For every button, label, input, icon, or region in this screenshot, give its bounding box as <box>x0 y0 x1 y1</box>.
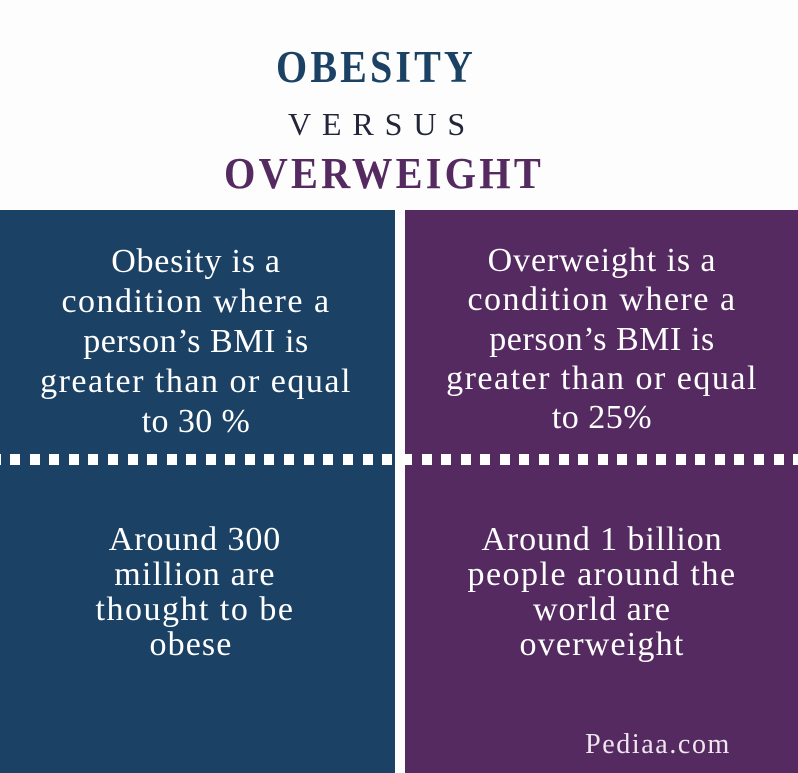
text: overweight definition: to 25% <box>552 399 652 436</box>
text: obesity definition: to 30 % <box>142 403 250 440</box>
title: versus: VERSUS <box>288 106 476 142</box>
text: obesity definition: person’s BMI is <box>83 323 309 360</box>
dotted divider <box>0 454 798 465</box>
text: overweight definition: person’s BMI is <box>489 321 715 358</box>
text: obesity definition: condition where a <box>61 283 331 320</box>
text: overweight prevalence <box>467 521 737 663</box>
text: obesity prevalence <box>96 521 294 663</box>
title: obesity: OBESITY <box>276 42 476 92</box>
text: obesity definition <box>40 243 352 440</box>
text: obesity definition: Obesity is a <box>111 243 281 280</box>
text: overweight definition <box>446 242 758 436</box>
panel: overweight <box>405 210 798 773</box>
logo: Pediaa.com: Pediaa.com <box>585 729 731 760</box>
text: overweight prevalence: world are <box>533 591 671 628</box>
text: obesity prevalence: million are <box>114 556 276 593</box>
text: overweight prevalence: people around the <box>467 556 737 593</box>
text: overweight prevalence: overweight <box>520 626 684 663</box>
title: overweight: OVERWEIGHT <box>224 149 544 198</box>
text: overweight definition: Overweight is a <box>488 242 716 279</box>
text: obesity prevalence: obese <box>150 626 232 663</box>
text: obesity prevalence: Around 300 <box>109 521 281 558</box>
text: obesity definition: greater than or equal <box>40 363 352 400</box>
text: obesity prevalence: thought to be <box>96 591 294 628</box>
panel: obesity <box>0 210 395 773</box>
text: overweight definition: greater than or equal <box>446 360 758 397</box>
text: overweight prevalence: Around 1 billion <box>481 521 723 558</box>
text: overweight definition: condition where a <box>467 281 737 318</box>
